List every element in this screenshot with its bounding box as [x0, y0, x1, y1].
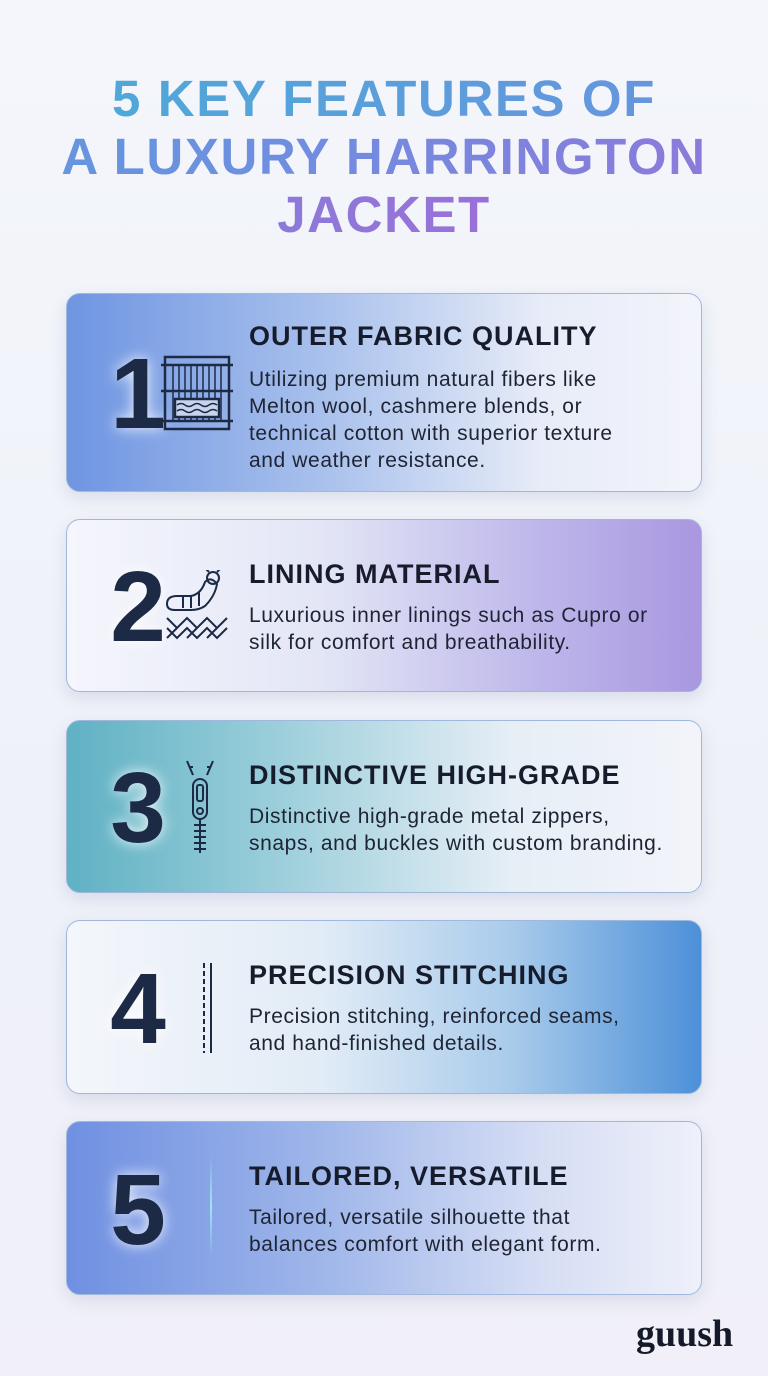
icon: stitch line	[203, 963, 212, 1053]
text 4: Precision stitching, reinforced seams,	[249, 1005, 620, 1028]
number 3: 3	[110, 752, 166, 864]
number 5: 5	[110, 1154, 166, 1266]
text 2: Luxurious inner linings such as Cupro or	[249, 604, 648, 627]
card 5: silhouette	[66, 1121, 702, 1295]
text 3: Distinctive high-grade metal zippers,	[249, 805, 610, 828]
card 2: lining material	[66, 519, 702, 692]
text 1	[249, 368, 613, 472]
card 1: outer fabric quality	[66, 293, 702, 492]
text 1: and weather resistance.	[249, 449, 486, 472]
heading 2: LINING MATERIAL	[249, 559, 500, 589]
text 4: and hand-finished details.	[249, 1032, 504, 1055]
title: 5 KEY FEATURES OF	[112, 70, 656, 127]
text 1: Utilizing premium natural fibers like	[249, 368, 597, 391]
icon: silkworm and weave	[166, 570, 228, 640]
number 2: 2	[110, 551, 166, 663]
text 1: technical cotton with superior texture	[249, 422, 613, 445]
text 1: Melton wool, cashmere blends, or	[249, 395, 582, 418]
number 1: 1	[110, 338, 166, 450]
text 4	[249, 1005, 620, 1055]
icon: zipper	[186, 760, 214, 853]
text 5: Tailored, versatile silhouette that	[249, 1206, 570, 1229]
text 2: silk for comfort and breathability.	[249, 631, 571, 654]
title: JACKET	[277, 186, 491, 243]
number 4: 4	[110, 953, 166, 1065]
text 2	[249, 604, 648, 654]
logo: guush	[636, 1313, 733, 1355]
card 4: stitching	[66, 920, 702, 1094]
title: A LUXURY HARRINGTON	[61, 128, 707, 185]
heading 3: DISTINCTIVE HIGH-GRADE	[249, 760, 621, 790]
icon: light line	[210, 1157, 212, 1257]
card 3: hardware	[66, 720, 702, 893]
text 5	[249, 1206, 602, 1256]
icon: loom	[161, 356, 233, 430]
text 5: balances comfort with elegant form.	[249, 1233, 602, 1256]
heading 1: OUTER FABRIC QUALITY	[249, 321, 598, 351]
text 3: snaps, and buckles with custom branding.	[249, 832, 663, 855]
text 3	[249, 805, 663, 855]
heading 5: TAILORED, VERSATILE	[249, 1161, 569, 1191]
heading 4: PRECISION STITCHING	[249, 960, 570, 990]
title	[61, 70, 707, 243]
